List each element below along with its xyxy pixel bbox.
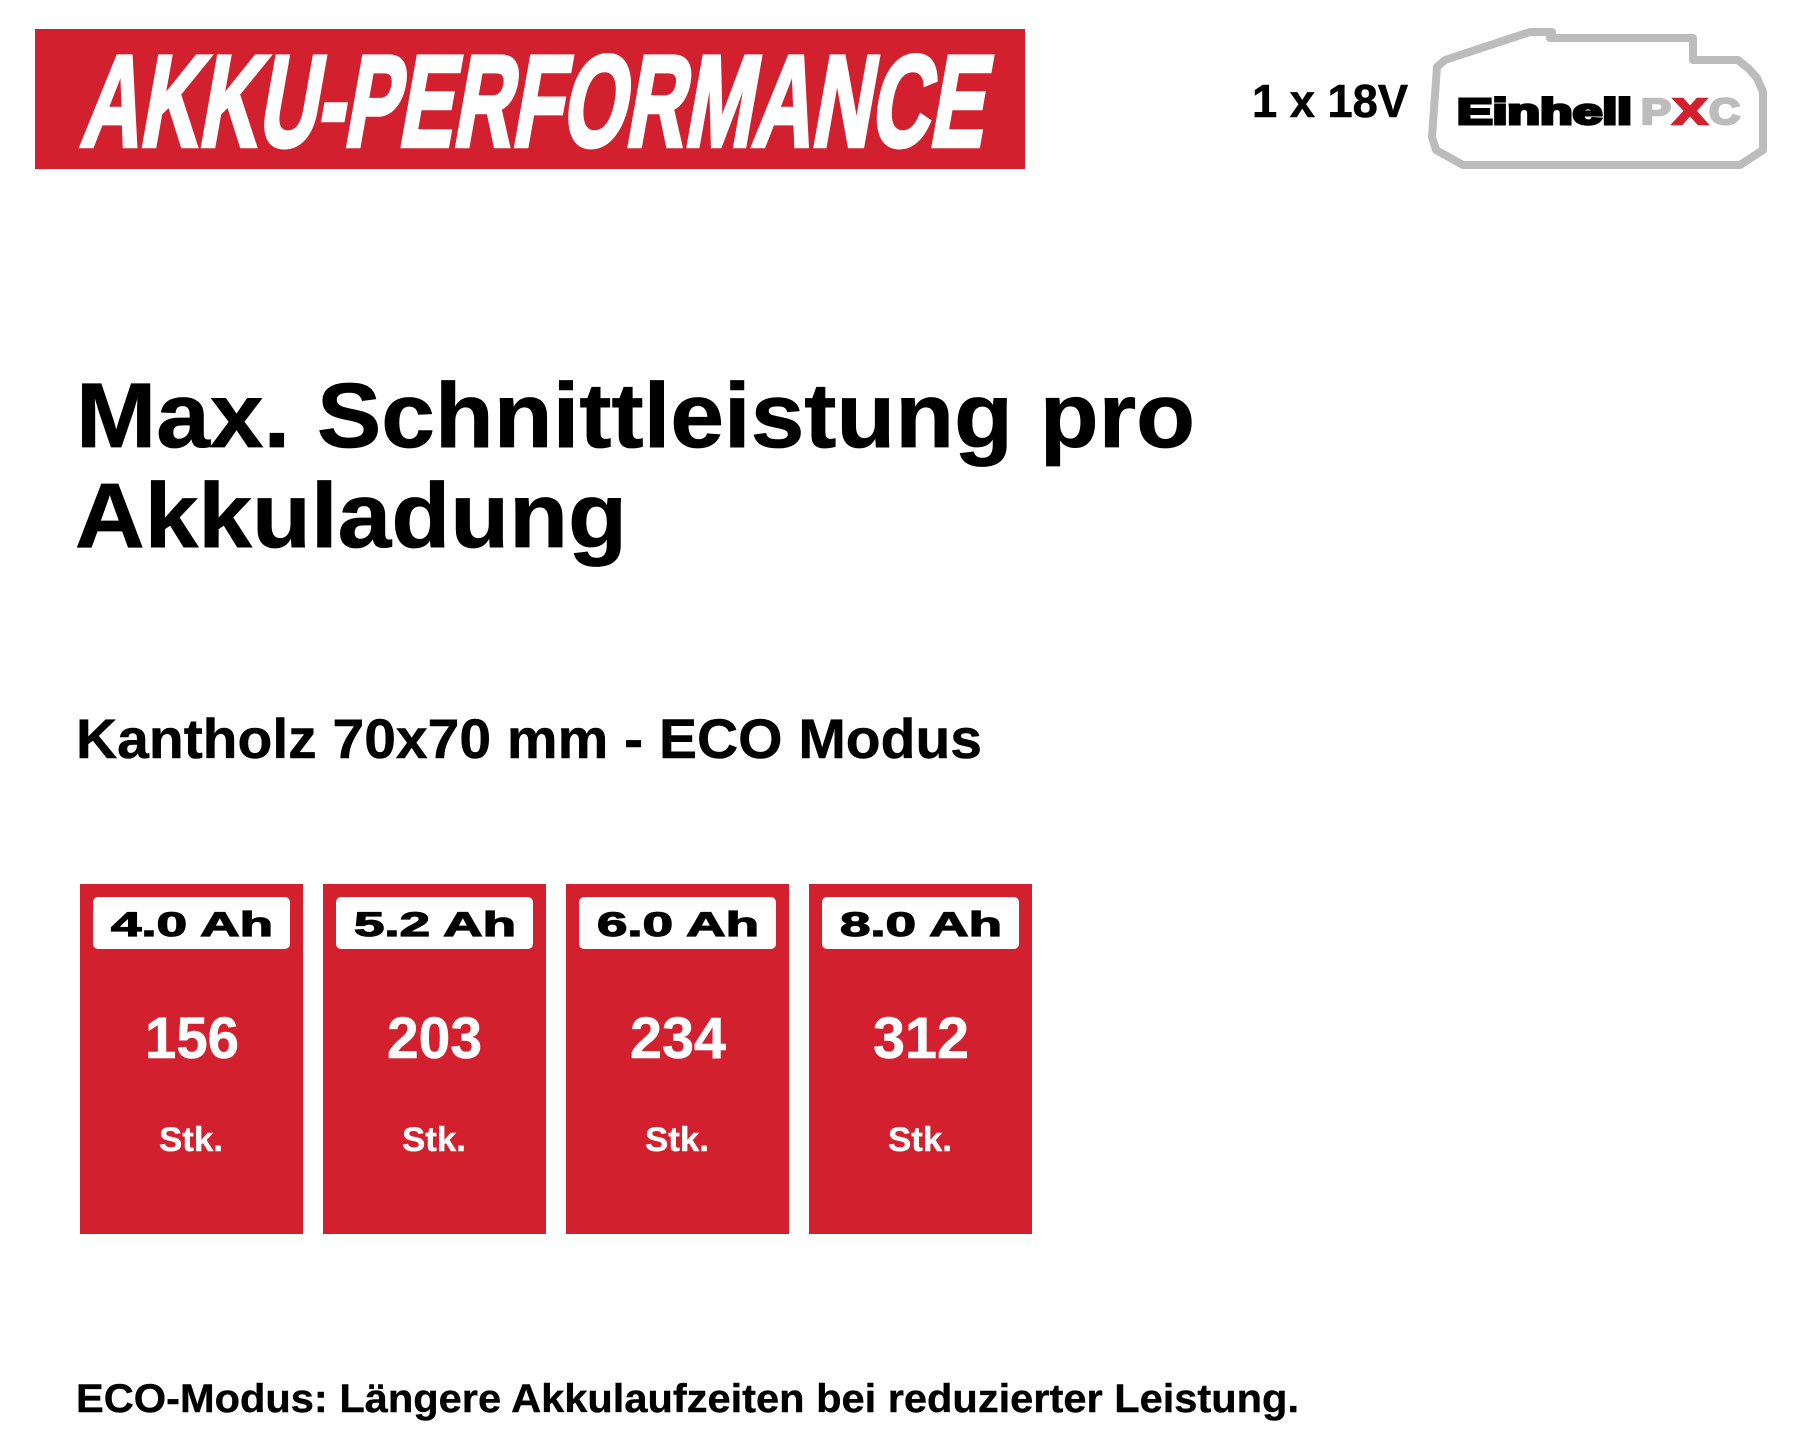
panel: 6.0 Ah: 6.0 Ah [597,906,759,944]
icon: battery with Einhell PXC logo: P [1641,91,1671,132]
panel: 4.0 Ah [80,884,303,1234]
banner: Akku-Performance: AKKU-PERFORMANCE [74,28,1003,174]
panel: 6.0 Ah: 234 [630,1006,726,1071]
panel: 8.0 Ah: Stk. [888,1121,952,1159]
panel: 8.0 Ah: 312 [873,1006,969,1071]
panel: 8.0 Ah: 8.0 Ah [840,906,1002,944]
subheading: Kantholz 70x70 mm - ECO Modus [76,707,982,770]
panel: 4.0 Ah: Stk. [159,1121,223,1159]
heading: Max. Schnittleistung pro [76,365,1195,467]
icon: battery with Einhell PXC logo: C [1709,91,1740,132]
icon: battery with Einhell PXC logo: Einhell [1457,91,1632,132]
panel: 5.2 Ah: 5.2 Ah [354,906,516,944]
heading [75,365,1195,567]
banner: Akku-Performance [35,28,1025,174]
heading: Akkuladung [75,465,627,567]
voltage label: 1 x 18V [1252,75,1408,127]
panel: 5.2 Ah: Stk. [402,1121,466,1159]
panel: 5.2 Ah [323,884,546,1234]
panel: 6.0 Ah [566,884,789,1234]
panel: 8.0 Ah [809,884,1032,1234]
footnote: ECO-Modus: Längere Akkulaufzeiten bei reduzierter Leistung. [76,1377,1299,1421]
panel: 4.0 Ah: 4.0 Ah [111,906,273,944]
icon: battery with Einhell PXC logo: X [1673,91,1707,132]
panel: 5.2 Ah: 203 [387,1006,482,1071]
panel: 6.0 Ah: Stk. [645,1121,709,1159]
icon: battery with Einhell PXC logo [1432,32,1763,165]
panel: 4.0 Ah: 156 [145,1006,239,1071]
